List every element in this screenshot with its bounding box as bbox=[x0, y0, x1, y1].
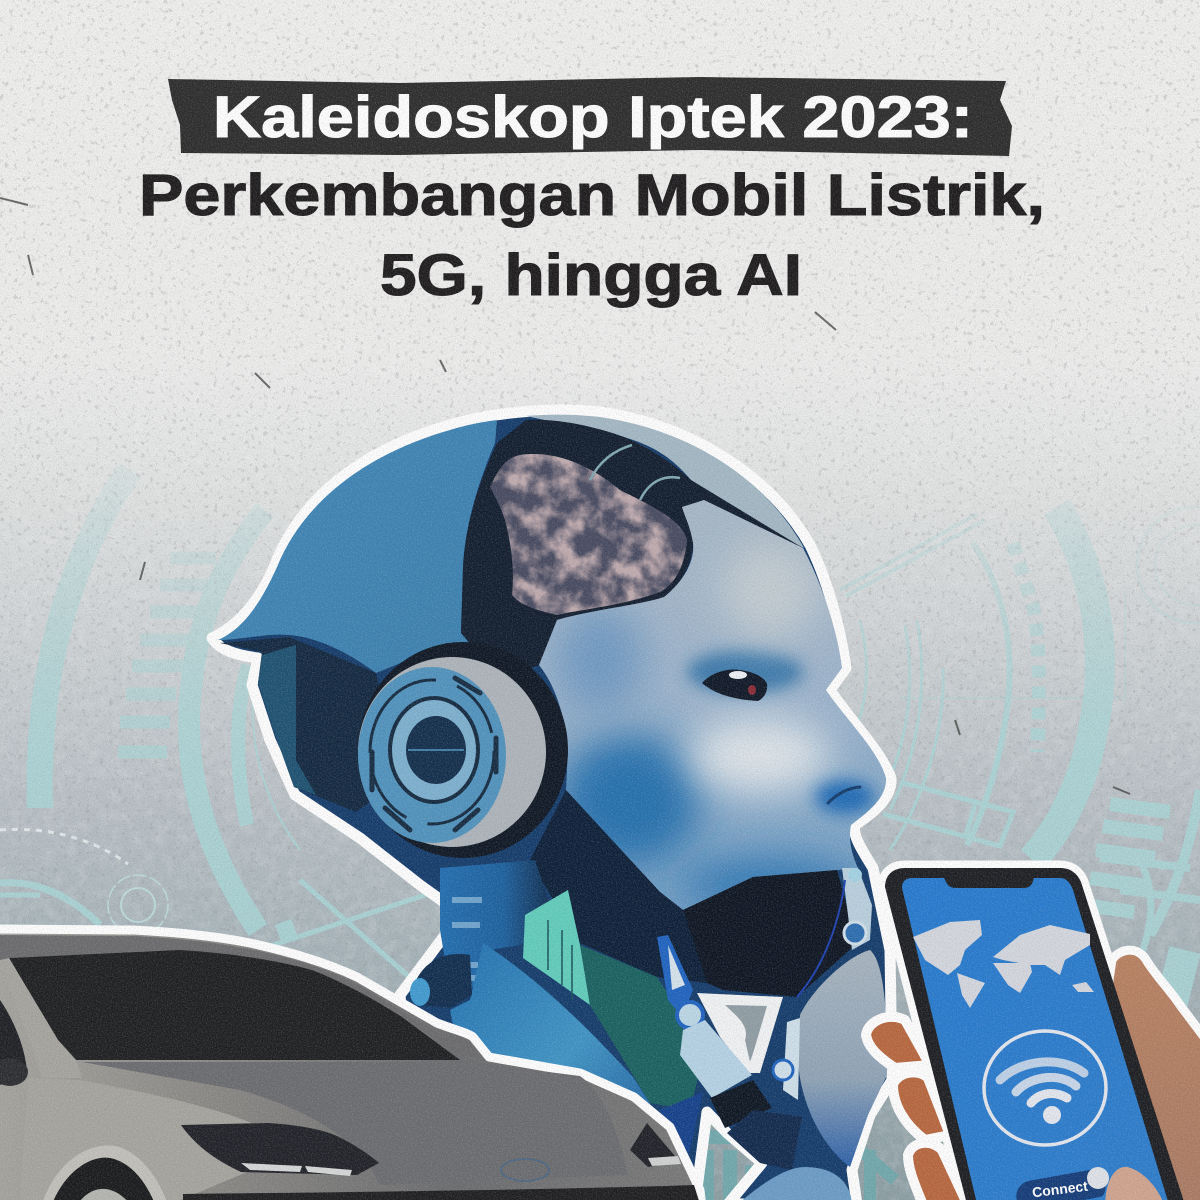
robot: joint ring bbox=[677, 1002, 703, 1028]
robot: eye bbox=[702, 670, 767, 701]
left inner arcs bbox=[189, 510, 265, 930]
robot: jaw hollow bbox=[683, 870, 853, 997]
robot: neck highlights bbox=[452, 900, 482, 978]
robot: gray sphere bbox=[798, 950, 887, 1167]
robot: joint ball bbox=[410, 978, 430, 1006]
face: nose and cheek highlight bbox=[690, 717, 830, 793]
robot: navy lower bbox=[727, 1110, 802, 1170]
bottom centre bars bbox=[700, 1137, 770, 1200]
car: pillar bbox=[0, 958, 82, 1078]
phone: frame bbox=[885, 868, 1186, 1200]
robot: joint left bbox=[412, 954, 472, 1008]
robot: green inner torso bbox=[580, 945, 700, 1110]
car: right headlight bbox=[630, 1123, 681, 1167]
car: tyre bbox=[52, 1158, 155, 1200]
robot: nostril line bbox=[828, 787, 860, 803]
robot: face bbox=[539, 500, 886, 910]
headphone: rings bbox=[370, 680, 494, 824]
hand: finger one bbox=[866, 1017, 930, 1068]
car: left headlight bbox=[181, 1123, 379, 1176]
hand holding phone bbox=[866, 950, 1200, 1200]
robot: arm blob bbox=[738, 1167, 852, 1200]
headphone: silver disc bbox=[358, 657, 546, 847]
robot: white notch bbox=[697, 993, 783, 1073]
robot: brain bbox=[490, 454, 687, 615]
car: wheel arch bbox=[42, 1146, 168, 1200]
robot: helmet bbox=[218, 420, 497, 673]
right square dashes bbox=[1013, 543, 1039, 752]
title line 1: Kaleidoskop Iptek 2023: bbox=[213, 85, 973, 150]
background: tech circle pattern bbox=[0, 470, 1200, 1200]
robot: right mechanical column bbox=[797, 868, 872, 997]
face: cheek blue shading bbox=[560, 735, 700, 865]
phone: world map bbox=[913, 920, 1094, 1008]
phone: connect button bbox=[1016, 1167, 1109, 1200]
phone: screen bbox=[902, 878, 1170, 1200]
hand: finger two bbox=[893, 1072, 950, 1140]
robot: neck strip and collar bbox=[530, 790, 707, 983]
face: forehead highlight bbox=[720, 540, 820, 640]
hand: thumb on phone bbox=[1105, 1167, 1165, 1200]
robot: left arm bracket bbox=[657, 935, 693, 1017]
right ladder bars bbox=[1084, 804, 1170, 912]
robot illustration bbox=[212, 410, 900, 1200]
lower left gauge bbox=[108, 875, 168, 935]
car: rim bbox=[78, 1189, 130, 1200]
robot: navy base bbox=[640, 1092, 703, 1200]
robot: headphone bbox=[358, 642, 568, 858]
title bbox=[168, 77, 1012, 156]
far right arc bbox=[1150, 790, 1200, 935]
robot: upper head plate bbox=[526, 415, 804, 548]
phone: wifi circle icon bbox=[984, 1031, 1106, 1145]
phone bbox=[885, 868, 1186, 1200]
robot: right rod bbox=[783, 1018, 800, 1100]
face: eye socket shade bbox=[687, 650, 803, 694]
robot: back circuit glow bbox=[258, 645, 316, 795]
car: fender light panel bbox=[20, 1078, 300, 1200]
robot: piston bbox=[680, 1020, 752, 1098]
background: scratches bbox=[0, 198, 1130, 794]
robot: neck column bbox=[440, 860, 555, 990]
robot: bracket highlight bbox=[668, 945, 685, 990]
lower-left circuit lines bbox=[258, 880, 440, 1000]
car: lower grille bbox=[183, 1185, 700, 1200]
car: badge bbox=[501, 1159, 549, 1181]
hand: finger three bbox=[908, 1143, 970, 1200]
robot: joint ring right bbox=[773, 1060, 793, 1080]
headphone: blue face bbox=[358, 667, 506, 843]
left outer thick arc bbox=[40, 470, 130, 808]
robot: white cut-out silhouette bbox=[212, 410, 892, 1200]
headphone: outer ring bbox=[358, 642, 568, 858]
phone: notch bbox=[944, 877, 1034, 888]
hand: right palm bbox=[1040, 950, 1200, 1200]
robot: teal panel bbox=[523, 890, 590, 1005]
right thick arc bbox=[1032, 507, 1100, 860]
right thin arcs bbox=[967, 543, 1010, 845]
headphone: outer dashes bbox=[372, 678, 496, 830]
lower right bars bbox=[1100, 858, 1200, 900]
far right faint circles bbox=[1137, 507, 1200, 623]
face: lower jaw blue bbox=[680, 859, 860, 911]
left ladder bars bbox=[118, 558, 216, 752]
car: outline and body bbox=[0, 929, 702, 1200]
title highlight band bbox=[168, 77, 1012, 156]
title line 3: 5G, hingga AI bbox=[380, 243, 802, 308]
phone: connect button: Connect bbox=[1031, 1178, 1089, 1200]
phone: white outline bbox=[885, 868, 1186, 1200]
robot: shoulder blue bbox=[450, 943, 650, 1160]
car: roof band bbox=[0, 935, 480, 1056]
car: windshield bbox=[9, 950, 460, 1060]
robot: brain cavity bbox=[461, 420, 803, 680]
robot: back of head circuitry bbox=[220, 637, 400, 812]
car bbox=[0, 929, 702, 1200]
face: nostril blue bbox=[815, 780, 875, 814]
car: mirror bbox=[0, 1058, 28, 1086]
robot: brain wisps bbox=[590, 445, 680, 500]
car: bonnet dark panel bbox=[82, 1062, 628, 1185]
title line 2: Perkembangan Mobil Listrik, bbox=[139, 163, 1045, 228]
car: side window bbox=[0, 1000, 27, 1085]
robot: black block bbox=[710, 1080, 772, 1128]
face: left temple blue bbox=[555, 605, 645, 715]
